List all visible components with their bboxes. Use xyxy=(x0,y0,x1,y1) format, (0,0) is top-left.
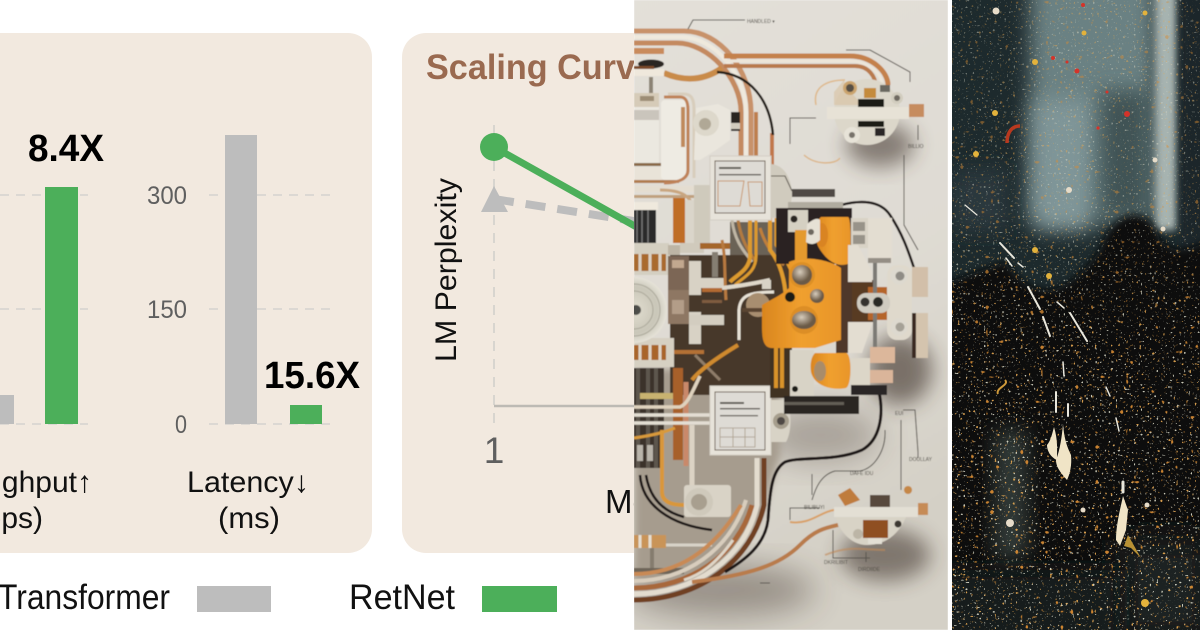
shadows xyxy=(625,123,932,616)
y axis label: LM Perplexity xyxy=(430,178,463,362)
left machinery xyxy=(634,48,794,574)
legend: Transformer xyxy=(0,578,170,617)
speckles xyxy=(952,0,1200,630)
line: retnet xyxy=(480,133,640,229)
panel: performance bars xyxy=(0,33,372,553)
gridlines and tick labels: 0 xyxy=(175,411,187,439)
axis label: throughput xyxy=(0,466,92,535)
annotation leader lines xyxy=(688,20,918,583)
annotation text: EUI xyxy=(895,411,903,417)
panel box: upper xyxy=(710,156,771,220)
orange central machine xyxy=(762,217,859,414)
upper right unit xyxy=(827,79,924,145)
pipes: bottom bundle xyxy=(634,392,885,600)
annotation text: DKRILIBIT xyxy=(824,560,848,566)
annotation text: HANDLED ▾ xyxy=(747,19,775,25)
bars: latency xyxy=(225,135,322,424)
line: transformer xyxy=(481,186,640,222)
annotation text: BILIBUYI xyxy=(804,505,825,511)
photo: machine schematic xyxy=(601,0,948,630)
axes xyxy=(494,125,640,430)
annotation text: DIRDIIDE xyxy=(858,567,881,573)
x tick: 1 xyxy=(484,430,504,471)
axis label: latency: (ms) xyxy=(218,502,280,535)
panel: scaling curve xyxy=(402,33,634,553)
taupe shaded wall behind the lower left wiring xyxy=(634,368,780,582)
right mechanism xyxy=(848,218,928,395)
panel box: lower xyxy=(710,386,771,455)
joint beside upper panel xyxy=(771,164,852,353)
gridlines and tick labels: 300 xyxy=(147,182,187,210)
pipes: top bundle xyxy=(634,31,914,268)
callout: 8.4X: 8.4X xyxy=(28,128,105,170)
heading: Scaling Curve xyxy=(426,48,654,87)
legend xyxy=(0,578,557,617)
joint beside lower panel xyxy=(771,400,790,442)
cream blobs xyxy=(1047,424,1141,558)
photo: dark speckled abstract xyxy=(940,0,1200,630)
annotation text xyxy=(747,19,933,573)
annotation text: DAFE IDU xyxy=(850,471,874,477)
gridlines and tick labels: 150 xyxy=(147,296,187,324)
legend: RetNet xyxy=(349,578,455,617)
large paint flecks xyxy=(973,3,1166,607)
bars: throughput xyxy=(0,187,78,424)
callout: 15.6X: 15.6X xyxy=(264,355,361,397)
axis label: latency: Latency↓ xyxy=(187,466,309,499)
light columns xyxy=(952,0,1181,244)
gridlines and tick labels xyxy=(0,182,332,439)
x axis label: Model xyxy=(605,483,695,520)
wheel xyxy=(634,277,663,343)
axis label: latency xyxy=(187,466,309,535)
white streaks xyxy=(965,205,1123,492)
annotation text: BILLIO xyxy=(908,144,924,150)
dark silhouette xyxy=(940,215,1200,630)
annotation text: DOULLAY xyxy=(909,457,933,463)
lower right unit xyxy=(834,486,928,545)
